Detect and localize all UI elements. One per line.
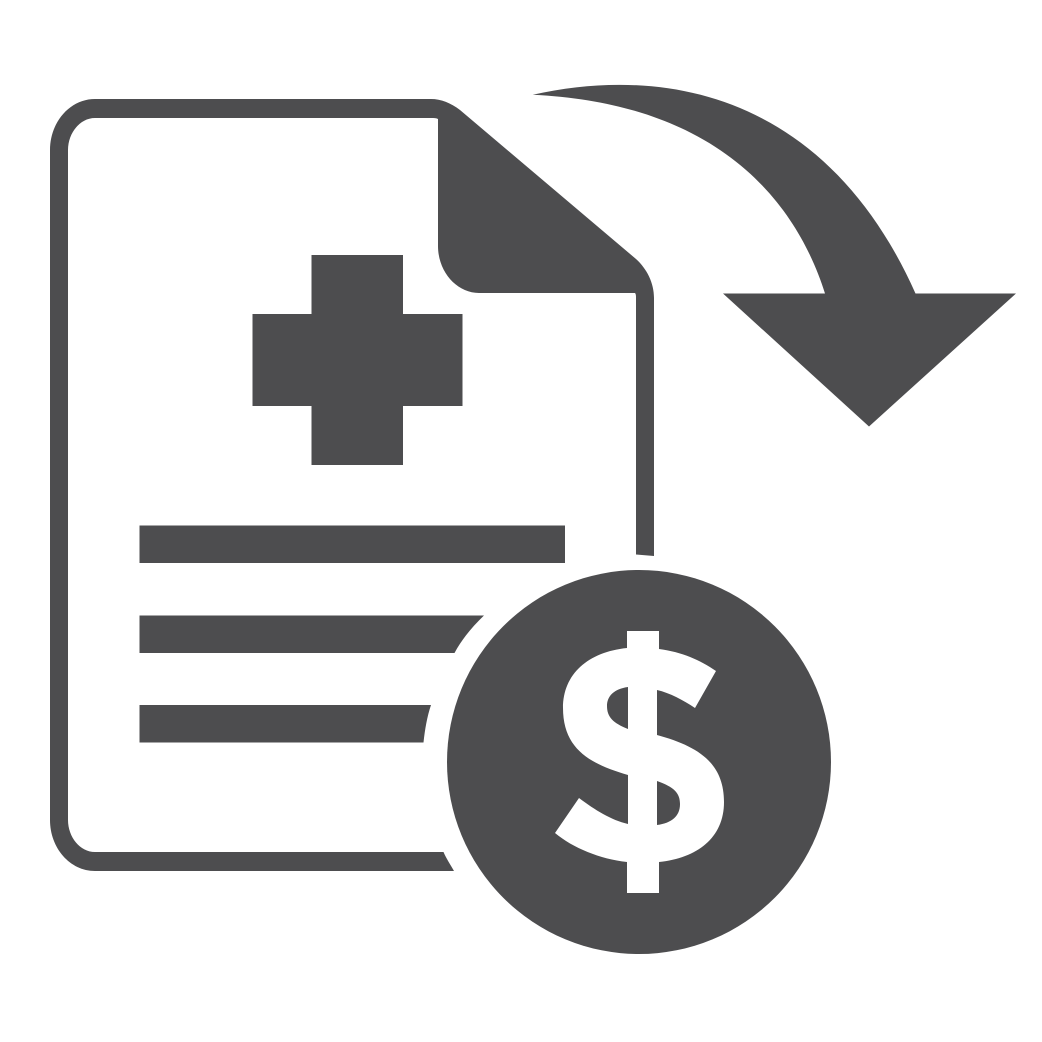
- icon: medical cross: [252, 255, 462, 465]
- text lines on document: [140, 526, 565, 742]
- dollar sign: [555, 631, 724, 893]
- icon: curved down arrow: [533, 85, 1016, 427]
- icon: dollar coin: [447, 570, 831, 954]
- icon: document outline: [50, 99, 654, 871]
